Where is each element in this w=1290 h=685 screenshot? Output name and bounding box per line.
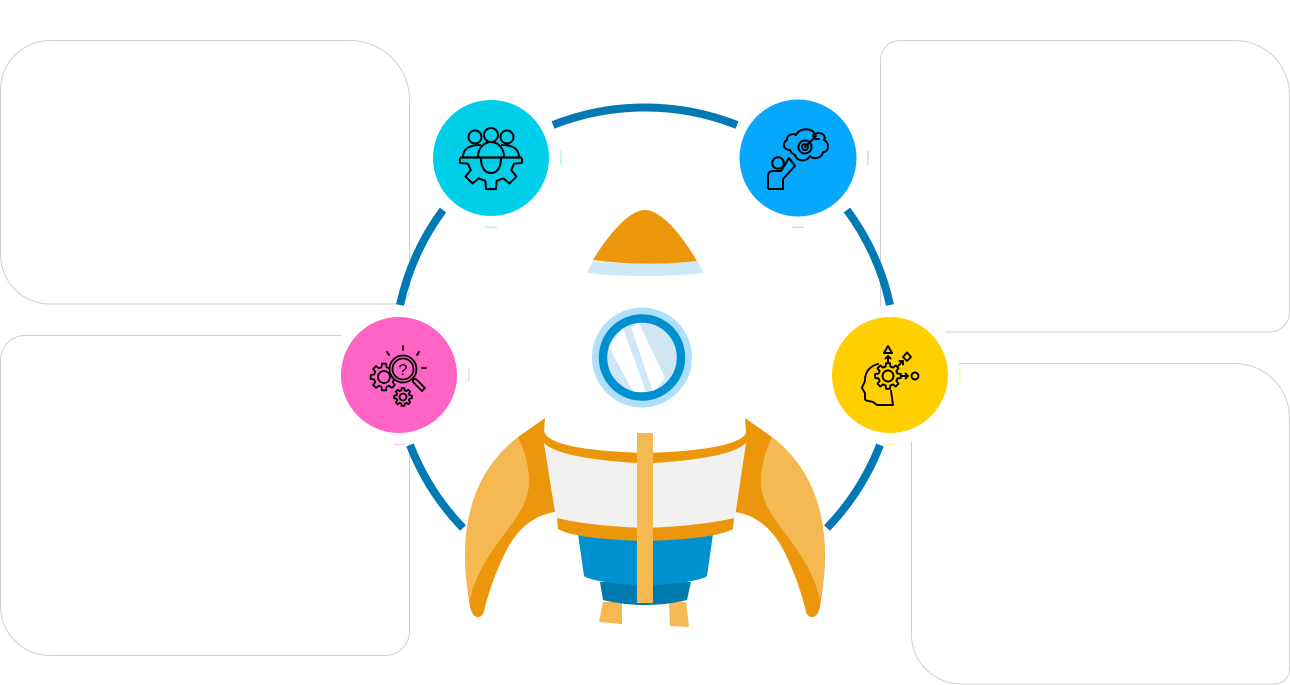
icon: head with gear and options bbox=[862, 346, 918, 405]
rocket: flames bbox=[599, 602, 689, 627]
icon: team with gear bbox=[460, 127, 522, 189]
panel: top left bbox=[0, 40, 410, 304]
rocket: blue skirt bbox=[578, 534, 713, 585]
icon circle: mind strategy bbox=[832, 317, 948, 433]
panel: top right bbox=[880, 40, 1290, 332]
rocket: window bbox=[592, 308, 692, 408]
rocket: dark blue nozzle bbox=[600, 582, 691, 605]
rocket: lower orange band bbox=[557, 518, 734, 541]
icon: person with target in cloud bbox=[768, 129, 828, 189]
icon circle: target thinking bbox=[740, 100, 856, 216]
rocket: grey band bbox=[544, 443, 746, 528]
rocket: white body bbox=[544, 205, 746, 530]
icon circle: problem search bbox=[341, 317, 457, 433]
icon: gears and magnifier: ? bbox=[399, 362, 408, 379]
rocket: nose cone base bbox=[587, 261, 704, 276]
panel: bottom left bbox=[0, 336, 410, 656]
panel: bottom right bbox=[912, 364, 1290, 684]
rocket: upper orange band bbox=[544, 431, 747, 464]
rocket: nose cone bbox=[593, 210, 697, 264]
white halos behind the icon circles bbox=[329, 88, 960, 445]
icon circle: team and gear bbox=[433, 100, 549, 216]
cycle ring bbox=[400, 107, 890, 528]
rocket bbox=[465, 205, 825, 627]
rocket: right fin bbox=[735, 418, 825, 617]
rocket: left fin bbox=[465, 418, 555, 617]
halo tints bbox=[393, 151, 960, 444]
rocket: centre strip bbox=[637, 433, 653, 603]
